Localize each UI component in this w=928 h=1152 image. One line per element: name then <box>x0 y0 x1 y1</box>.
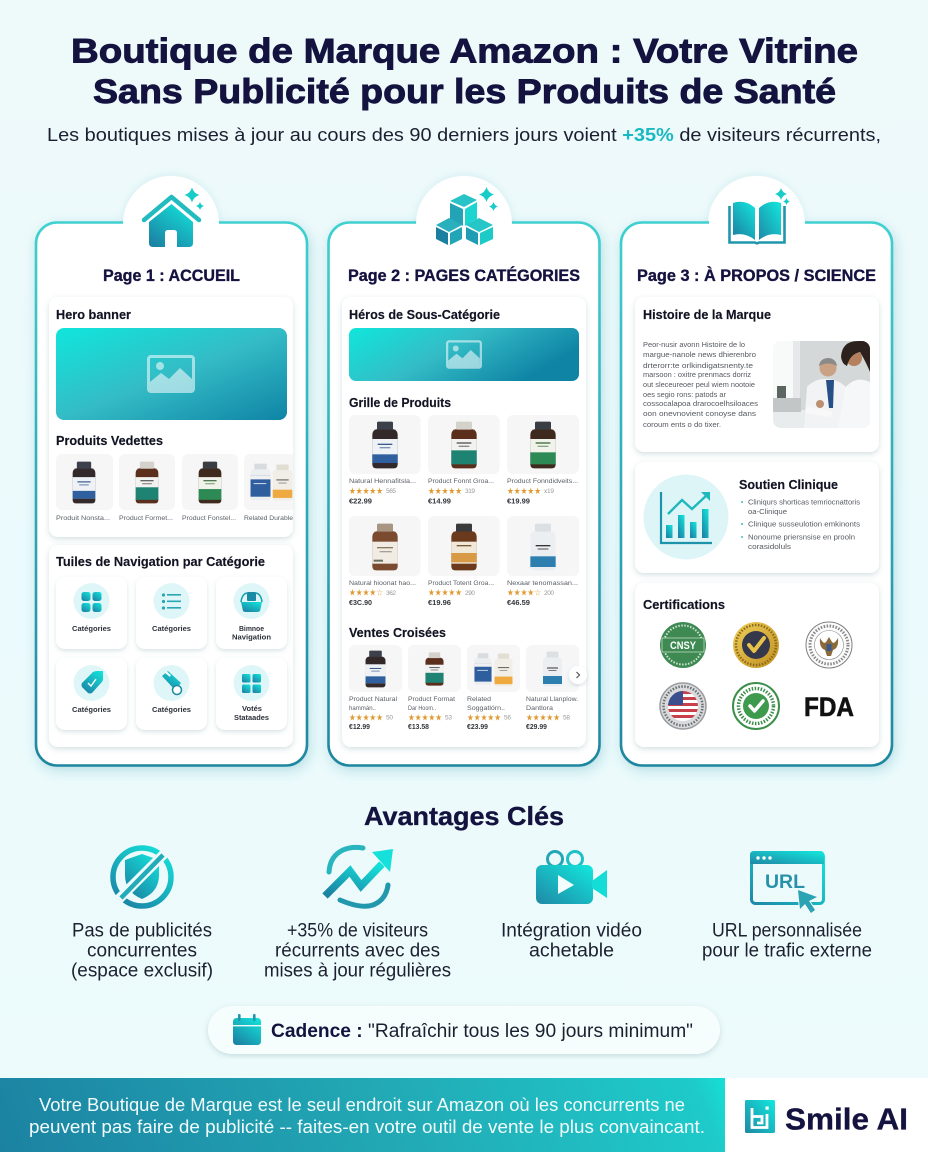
benefit text <box>702 920 872 962</box>
clinical bullets: Nonoume priersnsise en prooln <box>748 534 855 542</box>
product grid <box>349 415 579 607</box>
product grid: ★★★★★ <box>428 588 462 598</box>
icon: browser URL: URL <box>765 872 805 893</box>
icon: growth arrow <box>325 847 393 906</box>
featured product tiles <box>56 454 300 522</box>
product grid: 565 <box>386 488 396 495</box>
brand story paragraph: Peor-nusir avonn Histoire de lo <box>643 342 745 349</box>
benefit text <box>501 920 642 962</box>
seal: usa flag <box>660 683 706 729</box>
icon: book <box>730 188 790 243</box>
brand story paragraph: margue-nanole news dhierenbro <box>643 352 756 359</box>
cross-sell products: Product Natural <box>349 696 398 703</box>
brand story paragraph: coroum ents o do tixer. <box>643 422 721 429</box>
clinical bullets: corasidoluls <box>748 544 792 551</box>
cross-sell products <box>349 645 579 731</box>
benefit text: URL personnalisée <box>712 920 862 942</box>
panel: hero and featured products <box>49 297 300 537</box>
footer banner <box>0 1078 725 1152</box>
card heading: Page 3 : À PROPOS / SCIENCE <box>637 266 876 285</box>
footer message: Votre Boutique de Marque est le seul endroit sur Amazon où les concurrents ne <box>39 1095 685 1115</box>
icon: shield crossed <box>113 848 171 906</box>
product grid: ★★★★★ <box>349 487 383 497</box>
seal: CNSY <box>660 622 706 668</box>
seal: CNSY: CNSY <box>670 640 697 652</box>
panel: page 1 accueil <box>36 176 307 766</box>
product grid: €3C.90 <box>349 598 372 607</box>
cross-sell products: hammán.. <box>349 705 376 712</box>
icon: calendar <box>233 1014 261 1045</box>
seal: green check <box>733 683 779 729</box>
card heading: Page 1 : ACCUEIL <box>103 266 240 285</box>
benefit text <box>71 920 213 982</box>
cross-sell products: 53 <box>445 714 452 722</box>
tile: basket: Bimnoe <box>239 624 264 633</box>
tile: grid: Catégories <box>72 624 111 633</box>
clinical bullets <box>741 500 861 551</box>
cross-sell products: €12.99 <box>349 722 370 731</box>
product grid: €19.99 <box>507 496 530 506</box>
benefit text: Intégration vidéo <box>501 920 642 942</box>
icon: boxes <box>436 187 498 245</box>
panel: certifications <box>635 583 879 747</box>
heading: hero banner: Hero banner <box>56 308 131 322</box>
cross-sell products: 58 <box>563 714 570 722</box>
logo text: Smile AI <box>785 1102 908 1136</box>
brand story paragraph: marsoon : oxitre prenmacs dorriz <box>643 372 752 379</box>
heading: certifications: Certifications <box>643 598 725 612</box>
benefit text <box>264 920 451 982</box>
icon: chart circle <box>644 474 728 560</box>
product grid: x19 <box>544 488 554 495</box>
benefit text: mises à jour régulières <box>264 960 451 982</box>
product grid: Natural hioonat hao... <box>349 580 416 587</box>
cross-sell products: ★★★★★ <box>349 714 383 724</box>
benefit text: Pas de publicités <box>72 920 212 942</box>
brand story paragraph: cossocalapoa drarocoelhsiloaces <box>643 401 759 408</box>
featured product tiles: Product Formet... <box>119 515 173 522</box>
clinical bullets: oa-Clinique <box>748 509 787 516</box>
product grid: €22.99 <box>349 496 372 506</box>
cross-sell products: €23.99 <box>467 722 488 731</box>
brand story paragraph: drterorr:te orlkindigatsnenty.te <box>643 363 753 370</box>
cross-sell products: Related <box>467 696 491 703</box>
panel: brand story <box>635 297 879 452</box>
heading: clinical support: Soutien Clinique <box>739 478 838 492</box>
cross-sell products: Natural Llanplow. <box>526 696 578 703</box>
benefit text: +35% de visiteurs <box>287 920 428 942</box>
benefit: shoppable video <box>501 852 642 962</box>
product grid: €14.99 <box>428 496 451 506</box>
cross-sell products: Soggatlórn.. <box>467 705 505 712</box>
callout: cadence <box>208 1006 720 1054</box>
product grid: 200 <box>544 590 554 597</box>
brand story paragraph: oes segio rons: patods ar <box>643 392 727 399</box>
benefit: no competing ads <box>71 848 213 982</box>
tile: badges: Stataades <box>234 713 269 722</box>
photo: doctors <box>773 341 870 428</box>
cross-sell products: ★★★★★ <box>408 714 442 724</box>
cross-sell products: 56 <box>504 714 511 722</box>
tile: tag <box>56 658 127 730</box>
panel: category navigation tiles <box>49 545 293 747</box>
product grid: Product Totent Groa... <box>428 580 494 587</box>
heading: sub-category hero: Héros de Sous-Catégorie <box>349 308 500 322</box>
cross-sell products: Dantlora <box>526 705 553 712</box>
panel: category page content <box>342 297 587 747</box>
benefit text: (espace exclusif) <box>71 960 213 982</box>
tile: basket <box>216 577 287 649</box>
product grid: 319 <box>465 488 475 495</box>
product grid: Nexaar tenomassan... <box>507 580 578 587</box>
product grid: ★★★★★ <box>507 487 541 497</box>
panel: clinical support <box>635 462 879 573</box>
brand story paragraph <box>643 342 759 429</box>
cross-sell products: 50 <box>386 714 393 722</box>
tile: tag: Catégories <box>72 705 111 714</box>
product grid: €19.96 <box>428 598 451 607</box>
footer message <box>29 1095 705 1137</box>
heading: key benefits: Avantages Clés <box>364 801 564 831</box>
featured product tiles: Produit Nonsta... <box>56 515 110 522</box>
product grid: Natural Hennafitsla... <box>349 478 416 485</box>
heading: brand story: Histoire de la Marque <box>643 308 771 322</box>
cross-sell products: €13.58 <box>408 722 429 731</box>
featured product tiles: Related Durable <box>244 515 293 522</box>
brand story paragraph: out sleceureoer peul wiem nootoie <box>643 382 755 389</box>
tile: list: Catégories <box>152 624 191 633</box>
icon: video camera <box>536 852 607 904</box>
cross-sell products: Dar Hoom.. <box>408 705 436 712</box>
title <box>71 32 858 111</box>
panel: page 3 about science <box>621 176 892 766</box>
benefit: returning visitors <box>264 847 451 982</box>
benefit text: achetable <box>529 940 614 962</box>
tile: basket: Navigation <box>232 632 271 642</box>
footer message: peuvent pas faire de publicité -- faites-en votre outil de vente le plus convaincant. <box>29 1117 705 1137</box>
heading: product grid: Grille de Produits <box>349 396 451 410</box>
title: Sans Publicité pour les Produits de Santé <box>93 73 836 111</box>
card heading: Page 2 : PAGES CATÉGORIES <box>348 266 580 285</box>
product grid: 362 <box>386 590 396 597</box>
logo panel <box>725 1078 928 1152</box>
cross-sell products: ★★★★★ <box>467 714 501 724</box>
tile: badges <box>216 658 287 730</box>
clinical bullets: Cliniqurs shorticas temriocnattoris <box>748 500 861 506</box>
benefit: custom url <box>702 851 872 962</box>
cross-sell products: €29.99 <box>526 722 547 731</box>
panel: page 2 categories <box>328 176 600 766</box>
product grid: ★★★★☆ <box>507 588 541 598</box>
product grid: 290 <box>465 590 475 597</box>
tile: badges: Votés <box>242 704 262 713</box>
cross-sell products: Product Format <box>408 696 455 703</box>
tile: list <box>136 577 207 649</box>
product grid: Product Fonnt Groa... <box>428 478 494 485</box>
featured product tiles: Product Fonstel... <box>182 515 236 522</box>
product grid: €46.59 <box>507 598 530 607</box>
tile: tags with clock <box>136 658 207 730</box>
carousel arrow <box>569 666 587 684</box>
logo icon <box>745 1100 775 1133</box>
benefit text: pour le trafic externe <box>702 940 872 962</box>
benefit text: récurrents avec des <box>275 940 440 962</box>
cadence text: Cadence : "Rafraîchir tous les 90 jours minimum" <box>271 1021 693 1042</box>
heading: cross-sell: Ventes Croisées <box>349 626 446 640</box>
hero banner image <box>56 328 287 420</box>
product grid: Product Fonndidveits... <box>507 478 578 485</box>
cross-sell products: ★★★★★ <box>526 714 560 724</box>
brand story paragraph: oon onevnovient conoyse dans <box>643 411 757 418</box>
icon: browser URL <box>750 851 824 913</box>
logo: FDA: FDA <box>804 692 854 722</box>
icon: home <box>144 188 204 247</box>
sub-category hero banner <box>349 328 579 381</box>
title: Boutique de Marque Amazon : Votre Vitrine <box>71 32 858 70</box>
tile: grid <box>56 577 127 649</box>
clinical bullets: Clinique susseulotion emkinonts <box>748 522 861 528</box>
product grid: ★★★★☆ <box>349 588 383 598</box>
benefit text: concurrentes <box>87 940 197 962</box>
seal: eagle <box>806 622 852 668</box>
product grid: ★★★★★ <box>428 487 462 497</box>
subtitle: Les boutiques mises à jour au cours des 90 derniers jours voient +35% de visiteurs récurrents, <box>47 124 881 145</box>
heading: navigation tiles: Tuiles de Navigation par Catégorie <box>56 555 265 569</box>
tile: tags with clock: Catégories <box>152 705 191 714</box>
heading: featured products: Produits Vedettes <box>56 434 163 448</box>
seal: gold check <box>733 622 779 668</box>
